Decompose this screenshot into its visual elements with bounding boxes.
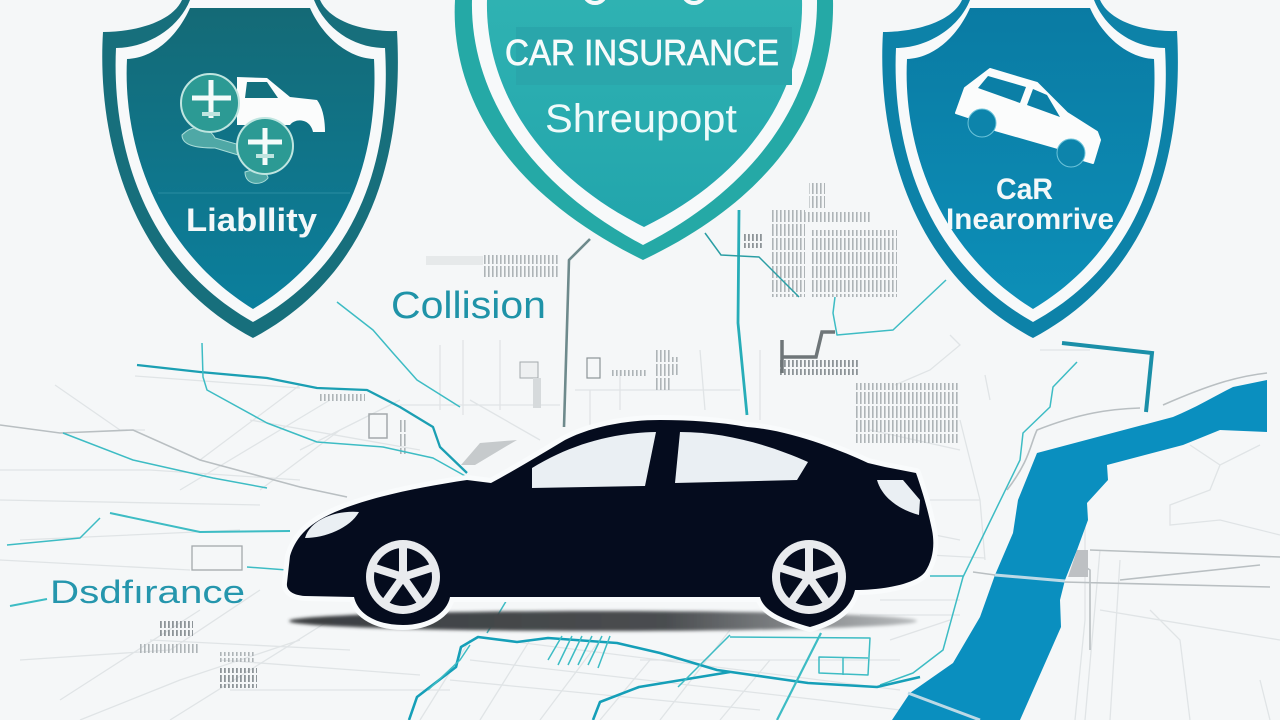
car windows [532,432,808,488]
headlight [305,512,359,538]
title: CAR INSURANCE [505,32,779,73]
river bridges [908,575,1065,720]
car body [287,420,933,627]
icon: tilted car [956,69,1100,167]
map: hatched building blocks [140,183,958,688]
label: Liability: Liabllity [186,202,317,238]
teal bracket road [1062,343,1152,412]
icon: pickup with plus badges [181,74,325,183]
map: teal routes [7,210,1077,720]
map: mid-grey roads [0,373,1280,650]
label: Dsdfirance: Dsdfırance [50,574,245,610]
panel: liability shield [102,0,398,338]
river [892,380,1267,720]
panel: central car insurance shield [455,0,833,260]
car shadow [289,611,917,631]
taillight [877,480,920,515]
car silhouette [287,420,933,627]
label: Collision: Collision [391,285,546,327]
subtitle: Shreupopt [545,97,737,141]
panel: car insurance shield [882,0,1178,338]
map: grey street grid [0,335,1280,720]
label: Insurance: Inearomrive [946,203,1114,236]
icon: car wheels cropped at top [584,0,705,3]
title band [516,27,792,85]
grey block beside river [1068,550,1088,577]
label: Car: CaR [996,173,1053,206]
divider [158,192,350,194]
front wheel [366,540,440,614]
rear wheel [772,540,846,614]
